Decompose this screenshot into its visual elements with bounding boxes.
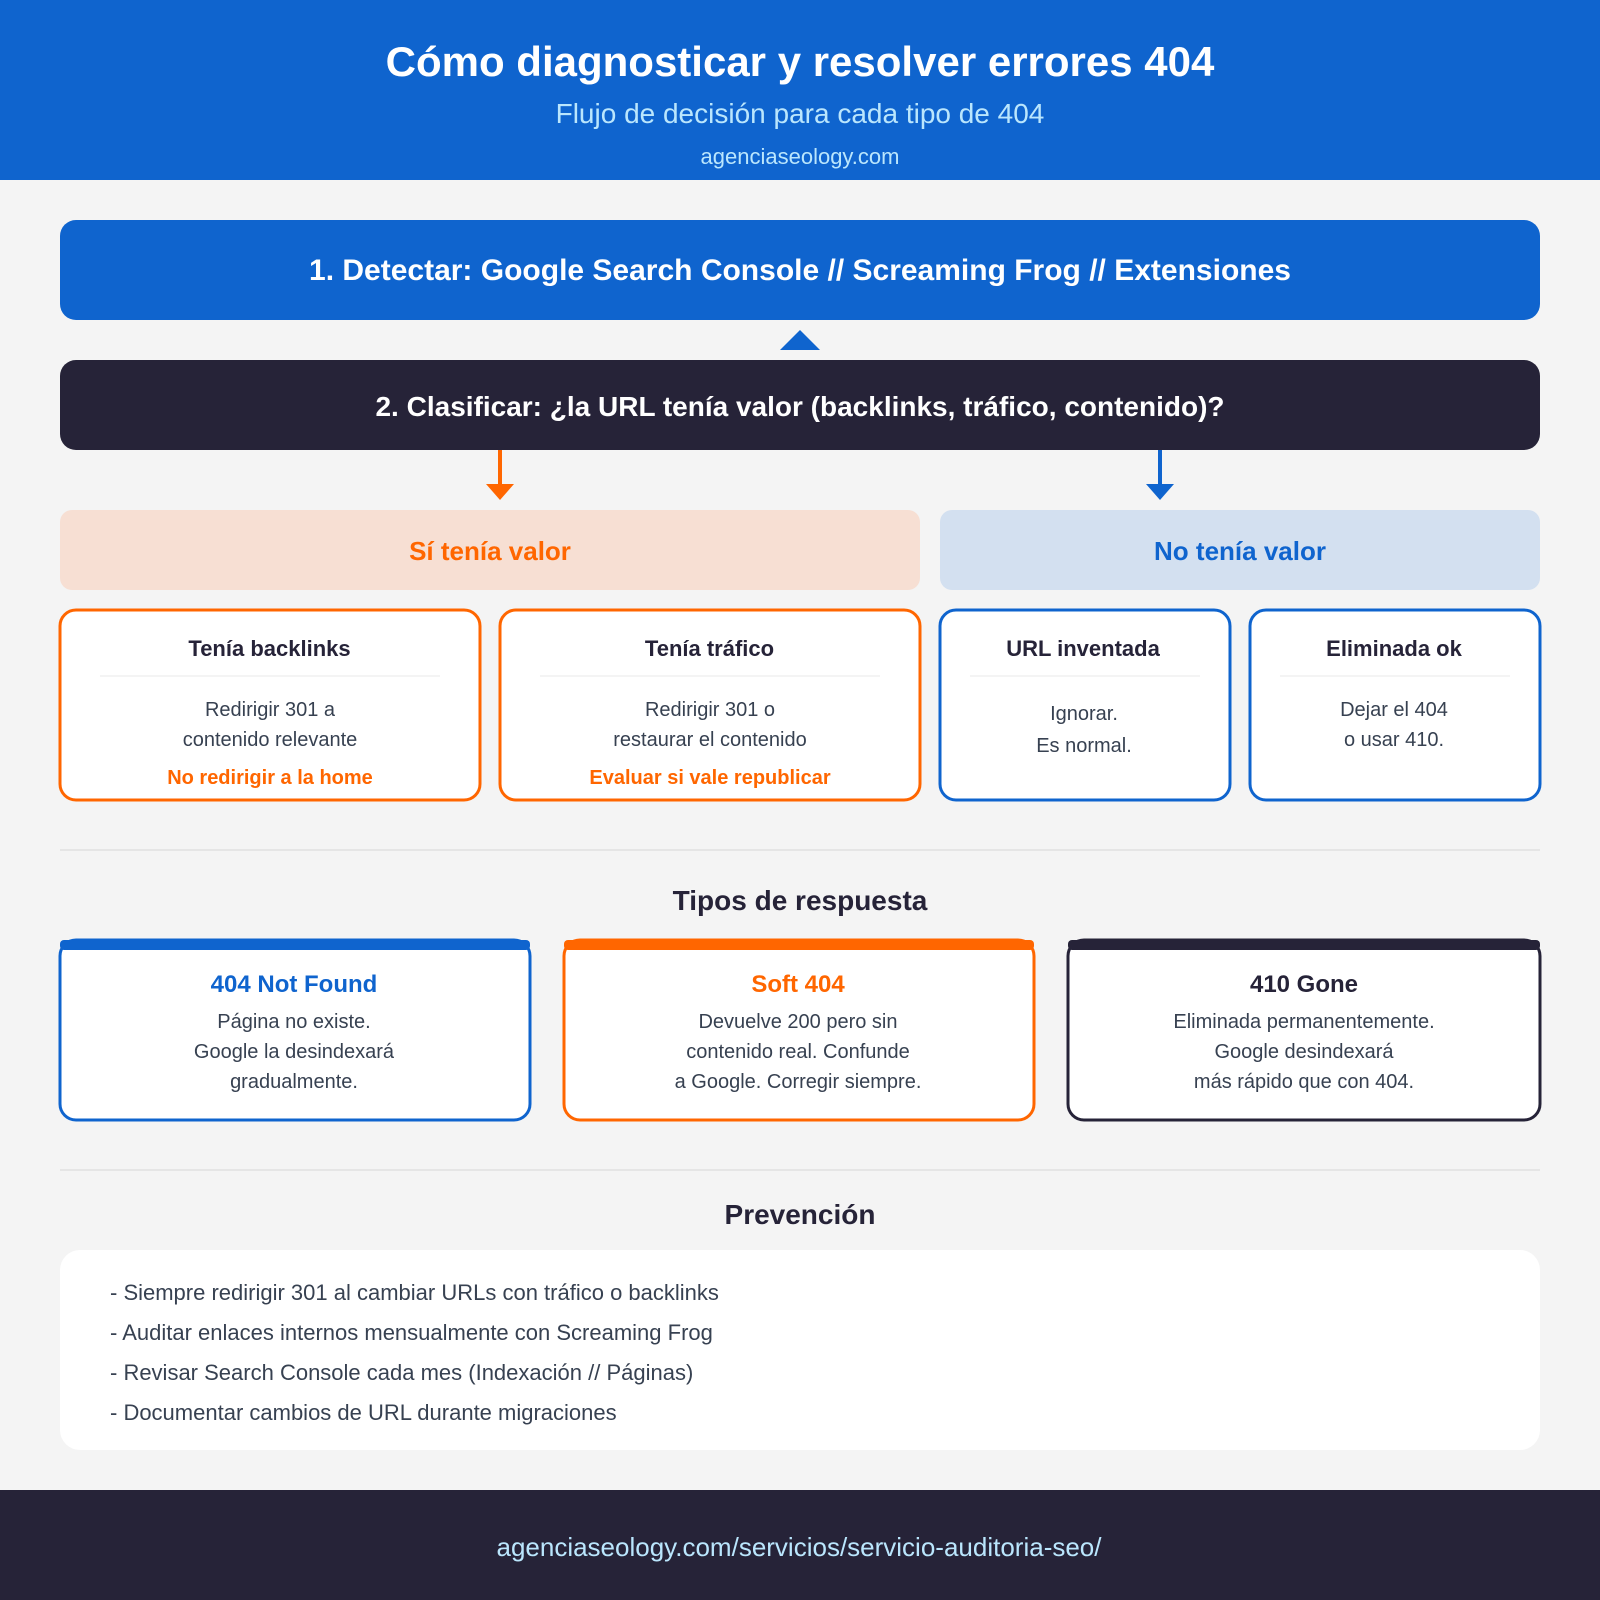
- footer: agenciaseology.com/servicios/servicio-auditoria-seo/: [496, 1532, 1102, 1562]
- step 2: classify: [60, 360, 1540, 450]
- card: removed ok: [1250, 610, 1540, 800]
- panel: prevention list: - Siempre redirigir 301 al cambiar URLs con tráfico o backlinks: [110, 1280, 719, 1305]
- card: soft 404: contenido real. Confunde: [686, 1041, 910, 1063]
- arrow: to yes branch: [486, 450, 514, 500]
- card: 410 gone: Eliminada permanentemente.: [1173, 1011, 1435, 1033]
- panel: no branch header: [940, 510, 1540, 590]
- heading: prevention: Prevención: [725, 1199, 875, 1230]
- card: traffic: Tenía tráfico: [645, 636, 774, 661]
- panel: yes branch header: Sí tenía valor: [409, 536, 571, 566]
- card: 404 not found: [60, 940, 530, 1120]
- card: traffic: Redirigir 301 o: [645, 699, 775, 721]
- card: removed ok: o usar 410.: [1344, 729, 1444, 751]
- card: 410 gone: 410 Gone: [1250, 971, 1358, 998]
- panel: prevention list: - Documentar cambios de URL durante migraciones: [110, 1400, 617, 1425]
- card: traffic: [500, 610, 920, 800]
- panel: prevention list: - Auditar enlaces internos mensualmente con Screaming Frog: [110, 1320, 713, 1345]
- site url: agenciaseology.com: [701, 144, 899, 169]
- step 2: classify: 2. Clasificar: ¿la URL tenía valor (backlinks, tráfico, contenido)?: [375, 391, 1225, 422]
- card: 404 not found: Página no existe.: [217, 1011, 371, 1033]
- card: removed ok: Dejar el 404: [1340, 699, 1448, 721]
- card: 404 not found: gradualmente.: [230, 1071, 358, 1093]
- card: 410 gone: Google desindexará: [1214, 1041, 1394, 1063]
- card: traffic: Evaluar si vale republicar: [589, 767, 831, 789]
- card: backlinks: Tenía backlinks: [188, 636, 351, 661]
- card: removed ok: Eliminada ok: [1326, 636, 1463, 661]
- card: backlinks: [60, 610, 480, 800]
- card: 410 gone: [1068, 940, 1540, 1120]
- card: 404 not found: Google la desindexará: [194, 1041, 395, 1063]
- step 1: detect: [60, 220, 1540, 320]
- card: invented url: [940, 610, 1230, 800]
- panel: no branch header: No tenía valor: [1154, 536, 1326, 566]
- panel: prevention list: [60, 1250, 1540, 1450]
- heading: response types: Tipos de respuesta: [673, 885, 928, 916]
- card: backlinks: contenido relevante: [183, 729, 357, 751]
- arrow: to no branch: [1146, 450, 1174, 500]
- card: invented url: URL inventada: [1006, 636, 1161, 661]
- title: Cómo diagnosticar y resolver errores 404: [386, 38, 1215, 85]
- card: invented url: Es normal.: [1036, 735, 1132, 757]
- card: invented url: Ignorar.: [1050, 703, 1118, 725]
- card: soft 404: a Google. Corregir siempre.: [675, 1071, 921, 1093]
- arrow: step connector: [780, 330, 820, 350]
- step 1: detect: 1. Detectar: Google Search Console // Screaming Frog // Extensiones: [309, 254, 1291, 287]
- card: 404 not found: 404 Not Found: [211, 971, 377, 998]
- panel: prevention list: - Revisar Search Console cada mes (Indexación // Páginas): [110, 1360, 693, 1385]
- card: soft 404: [564, 940, 1034, 1120]
- card: backlinks: Redirigir 301 a: [205, 699, 336, 721]
- card: soft 404: Devuelve 200 pero sin: [698, 1011, 898, 1033]
- card: traffic: restaurar el contenido: [613, 729, 807, 751]
- card: soft 404: Soft 404: [751, 971, 845, 998]
- header banner: [0, 0, 1600, 180]
- footer: [0, 1490, 1600, 1600]
- card: 410 gone: más rápido que con 404.: [1194, 1071, 1414, 1093]
- card: backlinks: No redirigir a la home: [167, 767, 373, 789]
- panel: yes branch header: [60, 510, 920, 590]
- subtitle: Flujo de decisión para cada tipo de 404: [556, 98, 1044, 129]
